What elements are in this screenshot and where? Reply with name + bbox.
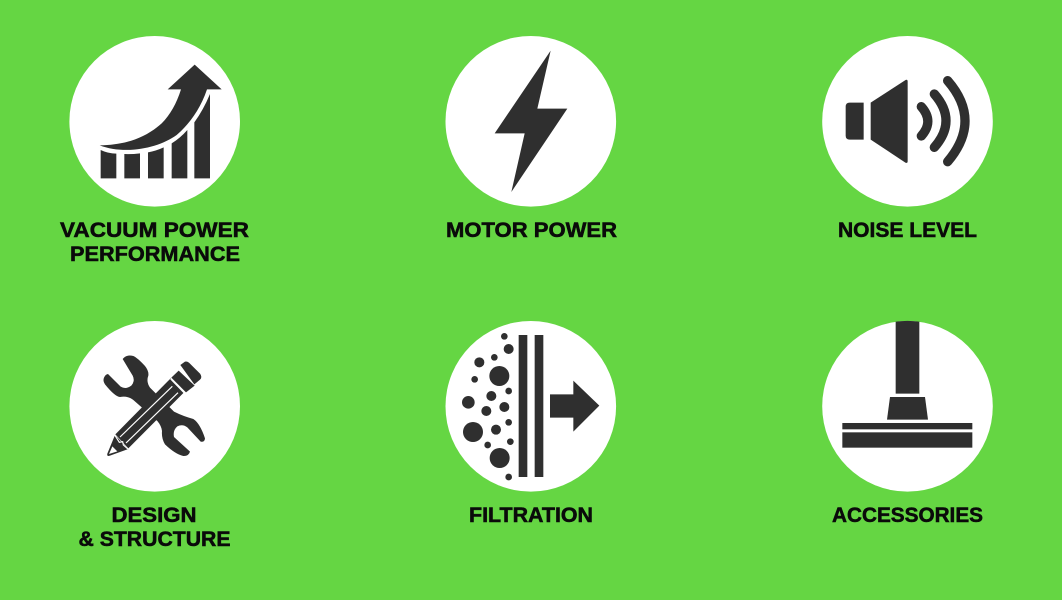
icon: speaker: [846, 80, 965, 163]
icon: rising bar chart with arrow: [100, 65, 222, 178]
heading: noise level: NOISE LEVEL: [838, 218, 977, 242]
icon: particles through filter: [462, 333, 599, 480]
heading: vacuum power performance: [60, 218, 249, 266]
heading: design and structure: & STRUCTURE: [78, 527, 230, 551]
pencil lines: [115, 379, 184, 449]
panel: vacuum power performance: [60, 36, 249, 266]
heading: motor power: MOTOR POWER: [446, 218, 617, 242]
icon: wrench and pencil: [104, 356, 205, 456]
circle: vacuum power background: [69, 36, 240, 207]
heading: design and structure: DESIGN: [112, 503, 196, 527]
heading: design and structure: [78, 503, 230, 551]
pencil eraser: [180, 361, 201, 384]
heading: accessories: ACCESSORIES: [832, 503, 983, 527]
circle: motor power background: [446, 36, 616, 207]
circle: design background: [69, 321, 240, 492]
pencil ferrule: [171, 371, 195, 392]
heading: vacuum power performance: PERFORMANCE: [70, 242, 240, 266]
icon: vacuum floor head: [842, 321, 972, 448]
pencil tip: [107, 435, 128, 456]
circle: filtration background: [446, 321, 616, 492]
wrench: [104, 356, 205, 456]
heading: filtration: FILTRATION: [469, 503, 593, 527]
heading: vacuum power performance: VACUUM POWER: [60, 218, 249, 242]
panel: motor power: [446, 36, 617, 242]
panel: noise level: [822, 36, 993, 242]
icon: lightning bolt: [495, 51, 567, 192]
panel: design and structure: [69, 321, 240, 551]
circle: accessories background: [822, 321, 993, 492]
pencil body: [115, 378, 184, 448]
circle: noise level background: [822, 36, 993, 207]
panel: filtration: [446, 321, 616, 527]
panel: accessories: [822, 321, 993, 527]
